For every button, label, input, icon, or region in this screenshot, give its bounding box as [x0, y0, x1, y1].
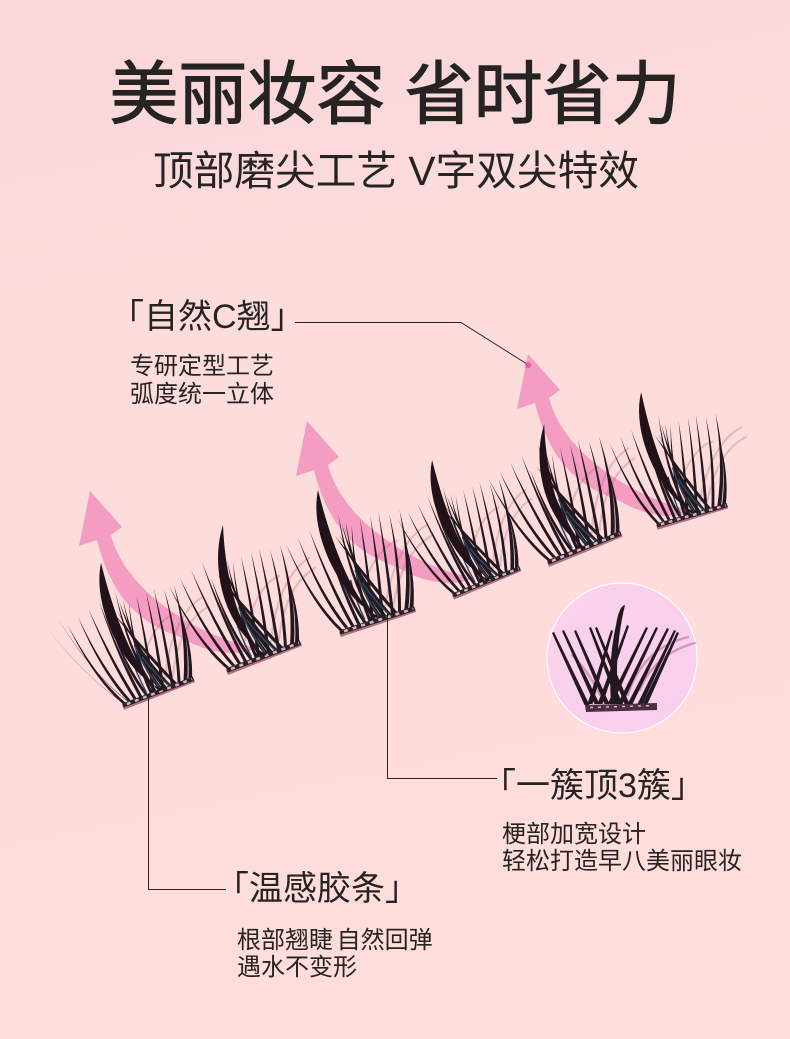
arrow: pink curve middle — [296, 421, 474, 583]
arrow: pink curve left — [79, 491, 257, 653]
arrow: pink curve right — [517, 354, 695, 516]
lash cluster 4 — [397, 460, 534, 601]
callout: 温感胶条 — [215, 870, 433, 981]
callout body: 弧度统一立体 — [130, 381, 274, 408]
callout body — [130, 353, 274, 408]
callout: 自然C翘 — [110, 298, 305, 408]
callout heading: 「一簇顶3簇」 — [482, 767, 705, 805]
lash cluster 3 — [282, 490, 434, 642]
callout heading: 「温感胶条」 — [215, 870, 419, 908]
inset circle: single lash close-up — [547, 583, 697, 733]
callout body: 轻松打造早八美丽眼妆 — [502, 848, 742, 875]
title: 美丽妆容 省时省力 — [109, 56, 681, 133]
callout body — [237, 927, 433, 981]
leader dot — [525, 362, 531, 368]
callout body: 根部翘睫 自然回弹 — [237, 927, 433, 954]
leader line: one cluster equals three — [388, 610, 497, 778]
callout heading: 「自然C翘」 — [110, 298, 305, 336]
callout body: 梗部加宽设计 — [502, 821, 646, 848]
callout: 一簇顶3簇 — [482, 767, 742, 875]
callout body: 专研定型工艺 — [130, 353, 274, 380]
lash cluster 5 — [488, 424, 636, 568]
callout body: 遇水不变形 — [237, 954, 357, 981]
leader line: warm glue strip — [148, 697, 226, 890]
lash cluster 2 — [169, 525, 315, 675]
lash cluster 1 — [47, 563, 207, 710]
leader line: C curl — [295, 322, 531, 368]
subtitle: 顶部磨尖工艺 V字双尖特效 — [153, 148, 639, 194]
callout body — [502, 821, 742, 875]
lash cluster 6 — [603, 392, 748, 536]
